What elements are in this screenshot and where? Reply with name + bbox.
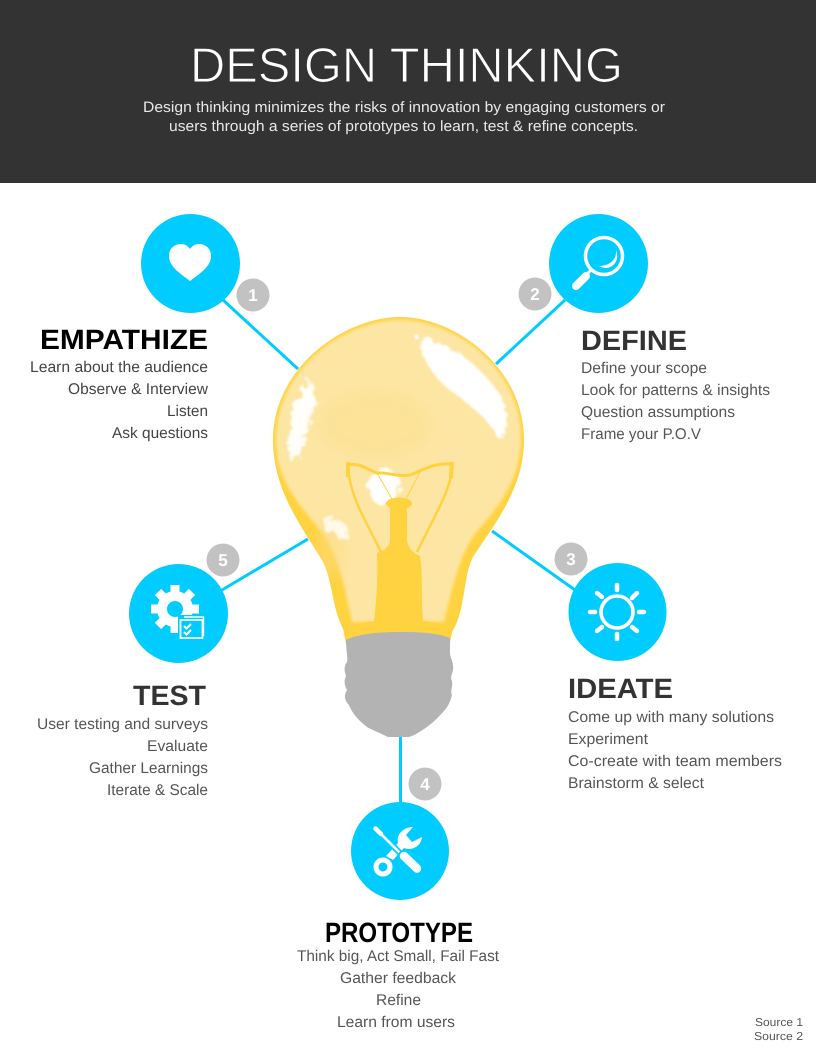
- list: test: Evaluate: [147, 738, 208, 755]
- list: ideate: Experiment: [568, 731, 649, 748]
- list: empathize: Learn about the audience: [30, 359, 208, 376]
- sources: Source 1: [755, 1017, 803, 1029]
- light bulb illustration: [265, 310, 535, 737]
- list: empathize: [30, 359, 209, 442]
- list: empathize: Listen: [167, 403, 208, 420]
- badge 2: 2: [530, 285, 540, 304]
- screw base: [345, 632, 453, 737]
- subtitle: Design thinking minimizes the risks of innovation by engaging customers or: [143, 99, 665, 116]
- badge 1: 1: [248, 286, 258, 305]
- step 2: define: [518, 214, 770, 443]
- list: prototype: Gather feedback: [340, 970, 456, 987]
- icon: gear and checklist window: [129, 564, 228, 663]
- icon: heart: [141, 214, 240, 313]
- list: prototype: Learn from users: [337, 1014, 455, 1031]
- list: ideate: Co-create with team members: [568, 753, 782, 770]
- heading: test: TEST: [133, 680, 206, 711]
- sources: [754, 1017, 803, 1043]
- step 4: prototype: [297, 768, 500, 1031]
- icon: crossed tools: [351, 802, 449, 900]
- connector lines: [222, 300, 575, 805]
- header band: [0, 0, 816, 183]
- list: define: Question assumptions: [581, 404, 735, 421]
- filament and support wires: [347, 462, 453, 552]
- list: test: [37, 716, 208, 799]
- sources: Source 2: [754, 1031, 803, 1043]
- list: define: Look for patterns & insights: [581, 382, 770, 399]
- icon: sun: [568, 563, 666, 661]
- list: define: Frame your P.O.V: [581, 426, 702, 443]
- badge 5: 5: [218, 551, 228, 570]
- badge 1: [236, 278, 270, 312]
- list: test: Iterate & Scale: [107, 782, 208, 799]
- list: empathize: Ask questions: [112, 425, 208, 442]
- title: DESIGN THINKING: [190, 39, 623, 93]
- step 3: ideate: [554, 542, 782, 792]
- heading: define: DEFINE: [581, 325, 687, 356]
- list: prototype: Think big, Act Small, Fail Fast: [297, 948, 500, 965]
- heading: empathize: EMPATHIZE: [40, 324, 208, 355]
- heading: prototype: PROTOTYPE: [325, 917, 473, 948]
- badge 4: [408, 768, 442, 800]
- list: prototype: Refine: [376, 992, 421, 1009]
- list: ideate: Brainstorm & select: [568, 775, 705, 792]
- list: empathize: Observe & Interview: [68, 381, 209, 398]
- list: define: Define your scope: [581, 360, 707, 377]
- heading: ideate: IDEATE: [568, 673, 673, 704]
- list: prototype: [297, 948, 500, 1031]
- badge 4: 4: [420, 775, 430, 794]
- badge 3: 3: [566, 550, 576, 569]
- subtitle: users through a series of prototypes to learn, test & refine concepts.: [169, 118, 638, 135]
- step 5: test: [37, 544, 240, 799]
- list: ideate: [568, 709, 782, 792]
- step 1: empathize: [30, 214, 270, 442]
- list: define: [581, 360, 770, 443]
- list: test: Gather Learnings: [89, 760, 208, 777]
- list: test: User testing and surveys: [37, 716, 208, 733]
- badge 3: [554, 542, 588, 576]
- subtitle: [143, 99, 665, 135]
- glass stem: [374, 498, 423, 622]
- collar: [343, 620, 453, 644]
- badge 2: [518, 278, 552, 310]
- list: ideate: Come up with many solutions: [568, 709, 774, 726]
- bulb glass: [273, 317, 524, 632]
- icon: magnifying glass: [549, 214, 648, 313]
- badge 5: [206, 544, 240, 576]
